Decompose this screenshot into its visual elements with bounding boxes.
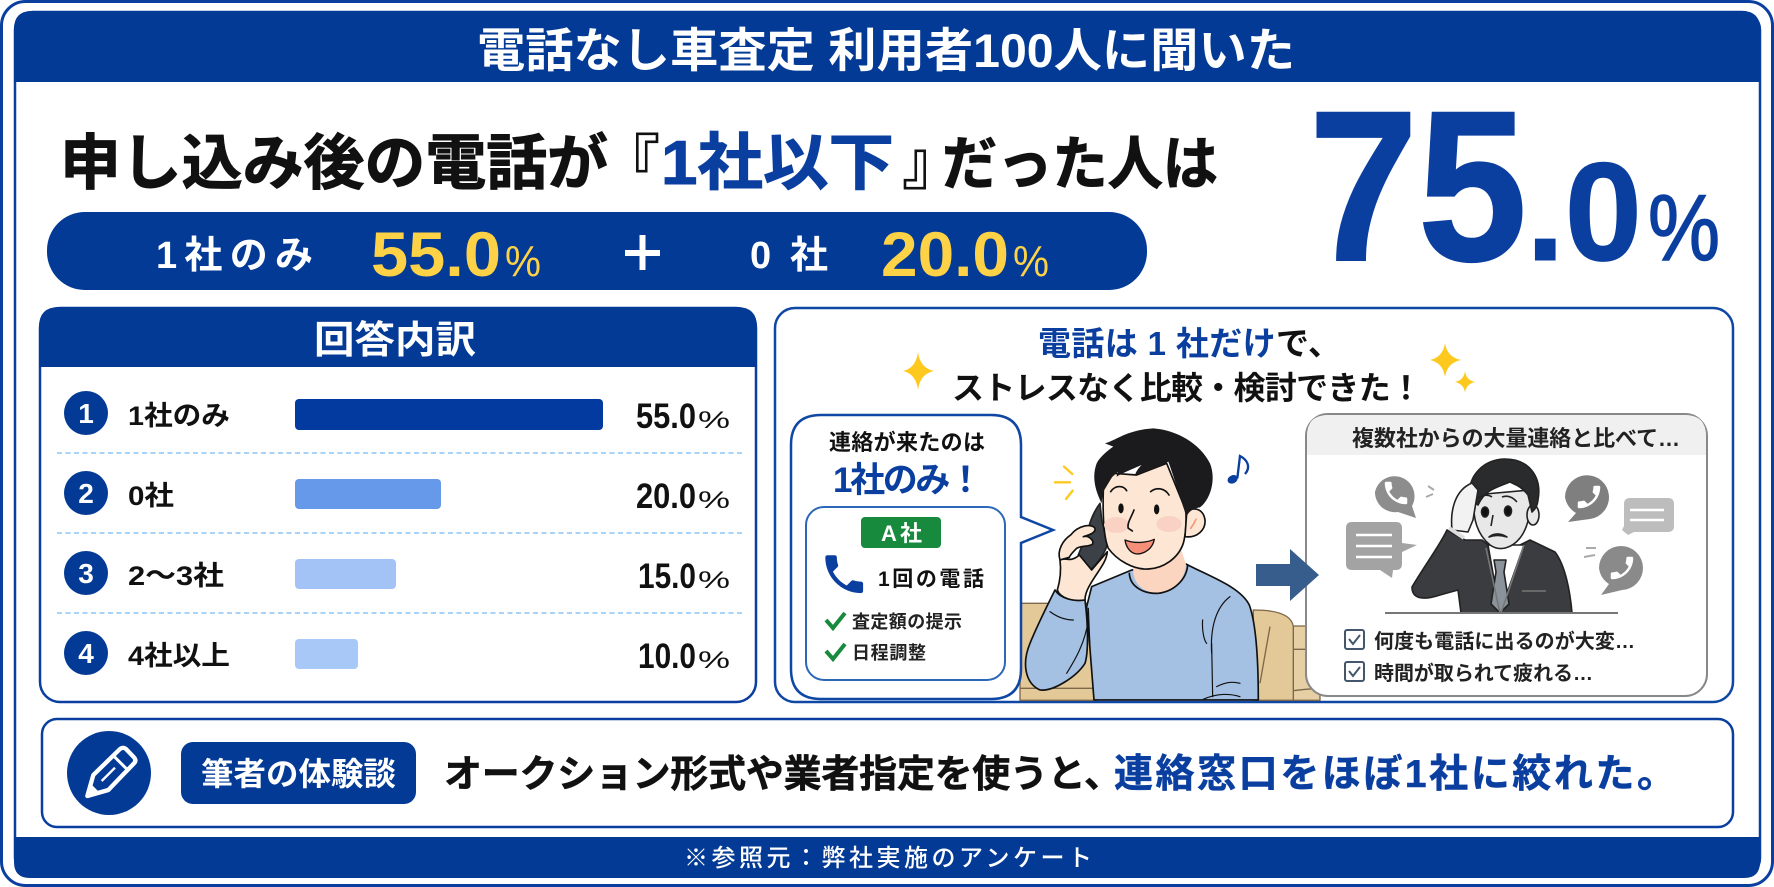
check item 1: 査定額の提示 xyxy=(852,611,962,632)
pill item: 0社 20.0% xyxy=(750,220,1049,290)
row 1: 55.0 xyxy=(636,397,696,436)
headline xyxy=(60,129,1218,198)
pill item: 1社のみ 55.0%: 1社のみ xyxy=(156,235,313,277)
illustration: worried man xyxy=(1412,459,1572,613)
headline: 申し込み後の電話が xyxy=(60,130,608,197)
illustration: sofa xyxy=(1020,603,1320,700)
pill item: 0社 20.0%: % xyxy=(1013,237,1049,286)
icon: message bubble left xyxy=(1346,522,1417,578)
pill item: 0社 20.0%: 20.0 xyxy=(881,220,1009,290)
row 2: 2 xyxy=(78,478,94,509)
box heading: 複数社からの大量連絡と比べて… xyxy=(1352,426,1680,451)
big number 75.0%: 75 xyxy=(1309,67,1527,306)
panel headline: 電話は 1 社だけで、 xyxy=(1038,325,1341,362)
bubble heading: 連絡が来たのは xyxy=(829,430,985,455)
row 3: 2～3社 xyxy=(128,561,224,591)
title: 電話なし車査定 利用者100人に聞いた xyxy=(477,24,1295,77)
pill item: 1社のみ 55.0%: 55.0 xyxy=(371,220,501,290)
inner card xyxy=(806,507,1005,680)
icon: phone xyxy=(825,555,863,593)
row 4: 4社以上 xyxy=(128,641,230,671)
icon: phone bubble 2 xyxy=(1565,475,1609,522)
row 2: 20.0 xyxy=(636,477,696,516)
plus sign xyxy=(625,235,660,270)
complaint 2: 時間が取られて疲れる… xyxy=(1374,661,1593,685)
complaint 1: 何度も電話に出るのが大変… xyxy=(1374,629,1635,653)
row 1: 1社のみ xyxy=(128,401,230,431)
label: 筆者の体験談 xyxy=(181,742,416,804)
panel: experience illustration xyxy=(775,308,1733,702)
row 3: 15.0 xyxy=(638,557,696,596)
headline: だった人は xyxy=(942,132,1218,197)
row 3: 3 xyxy=(78,558,94,589)
illustration: happy man on phone xyxy=(1026,428,1258,700)
icon: sound rays xyxy=(1055,467,1073,499)
label: 筆者の体験談: 筆者の体験談 xyxy=(201,756,396,792)
badge: A社: A社 xyxy=(881,521,922,546)
experience sentence: オークション形式や業者指定を使うと、 xyxy=(444,754,1122,796)
row 4: % xyxy=(698,647,730,674)
big number 75.0%: % xyxy=(1648,175,1720,280)
footer band xyxy=(14,837,1760,878)
row 3: % xyxy=(698,567,730,594)
pill item: 1社のみ 55.0%: % xyxy=(505,237,541,286)
pill item: 0社 20.0%: 0社 xyxy=(750,235,828,277)
headline: 『 xyxy=(600,130,660,197)
summary pill xyxy=(47,212,1147,290)
panel: 回答内訳 xyxy=(39,307,757,702)
icon: phone bubble 3 xyxy=(1599,546,1643,595)
call count: 1回の電話 xyxy=(878,568,984,591)
arrow xyxy=(1256,549,1319,601)
stress lines xyxy=(1426,486,1596,557)
headline: 1社以下 xyxy=(661,129,894,198)
speech bubble xyxy=(791,415,1053,699)
big number 75.0% xyxy=(1309,67,1720,306)
big number 75.0%: .0 xyxy=(1526,133,1642,290)
icon: phone bubble 1 xyxy=(1375,476,1416,518)
row dividers xyxy=(57,453,742,613)
comparison box xyxy=(1306,414,1707,696)
icon: pencil xyxy=(67,731,151,815)
panel: author's experience xyxy=(42,719,1733,827)
row 2: 0社 xyxy=(128,481,174,511)
source note: ※参照元：弊社実施のアンケート xyxy=(684,845,1092,872)
row 4: 10.0 xyxy=(638,637,696,676)
row 1 xyxy=(64,391,730,436)
icon: message bubble right xyxy=(1622,498,1674,535)
row 4: 4 xyxy=(78,638,94,669)
headline: 』 xyxy=(902,130,962,197)
badge: A社 xyxy=(861,517,941,548)
header band xyxy=(14,11,1760,82)
panel heading: 回答内訳 xyxy=(314,320,476,362)
experience sentence xyxy=(444,753,1676,796)
bubble highlight: 1社のみ！ xyxy=(833,461,983,500)
panel headline: ストレスなく比較・検討できた！ xyxy=(952,370,1422,406)
check item 2: 日程調整 xyxy=(852,643,926,663)
row 1: 1 xyxy=(78,398,94,429)
sparkles xyxy=(903,343,1475,393)
row 3 xyxy=(64,551,730,596)
experience sentence: 連絡窓口をほぼ1社に絞れた。 xyxy=(1114,753,1676,796)
row 4 xyxy=(64,631,730,676)
icon: music note xyxy=(1226,456,1248,485)
row 2: % xyxy=(698,487,730,514)
row 1: % xyxy=(698,407,730,434)
pill item: 1社のみ 55.0% xyxy=(156,220,541,290)
row 2 xyxy=(64,471,730,516)
panel headline xyxy=(952,325,1422,406)
base line xyxy=(1385,612,1618,614)
